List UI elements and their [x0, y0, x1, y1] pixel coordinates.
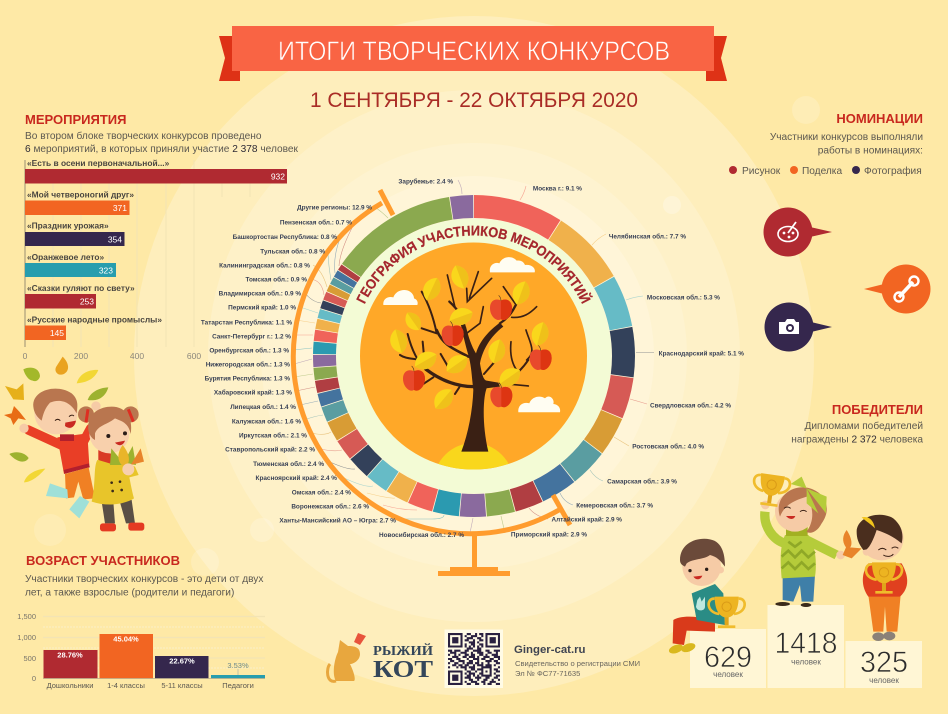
bar chart: events: [23, 158, 287, 361]
donut region labels: [201, 178, 744, 539]
logo: Ginger Cat: [328, 633, 433, 683]
donut region labels: Нижегородская обл.: 1.3 %: [206, 360, 290, 368]
pale green inner ring: [336, 218, 612, 494]
donut region labels: Калининградская обл.: 0.8 %: [219, 262, 310, 270]
donut region labels: Липецкая обл.: 1.4 %: [230, 403, 296, 411]
date subtitle: 1 СЕНТЯБРЯ - 22 ОКТЯБРЯ 2020: [310, 88, 638, 112]
legend: Поделка: [802, 166, 842, 177]
boy holding cup: [857, 515, 907, 641]
panel: nominations: [729, 111, 930, 352]
bar: 932: 932: [271, 172, 285, 182]
y axis labels: 1,500: [17, 612, 36, 621]
podium: first place: [768, 605, 844, 688]
donut region labels: Ханты-Мансийский АО – Югра: 2.7 %: [279, 516, 396, 524]
donut region labels: Краснодарский край: 5.1 %: [659, 350, 744, 358]
bar: 354: [25, 220, 124, 246]
donut region labels: Омская обл.: 2.4 %: [292, 488, 351, 496]
donut region labels: Башкортостан Республика: 0.8 %: [233, 233, 337, 241]
podium: second place: [690, 629, 766, 688]
bar: 253: 253: [80, 296, 94, 306]
donut region labels: Калужская обл.: 1.6 %: [232, 418, 301, 426]
donut region labels: Кемеровская обл.: 3.7 %: [576, 502, 653, 510]
nominations text: работы в номинациях:: [818, 144, 923, 156]
column: preschool: [44, 650, 98, 690]
column: grades 5-11: 5-11 классы: [161, 681, 203, 690]
podium: third place: 325: [860, 646, 908, 679]
legend: Рисунок: [742, 166, 781, 177]
bar: 932: «Есть в осени первоначальной...»: [27, 158, 170, 168]
column: teachers: 3.53%: [227, 661, 249, 670]
donut region labels: Томская обл.: 0.9 %: [245, 276, 307, 284]
panel: events: [23, 112, 298, 361]
heading: events: МЕРОПРИЯТИЯ: [25, 112, 126, 127]
x axis labels: [23, 351, 201, 361]
column: grades 1-4: 45.04%: [113, 634, 139, 644]
donut region labels: Красноярский край: 2.4 %: [256, 474, 337, 482]
donut region labels: Другие регионы: 12.9 %: [297, 204, 372, 212]
bar: 253: [25, 283, 135, 308]
illustration: winners children: [668, 472, 907, 655]
donut region labels: Владимирская обл.: 0.9 %: [219, 290, 301, 298]
donut region labels: Хабаровский край: 1.3 %: [214, 388, 292, 396]
winners text: Дипломами победителей: [805, 420, 923, 432]
illustration: jumping children with leaves: [4, 357, 144, 531]
column chart: age: [17, 612, 265, 690]
heading: age: ВОЗРАСТ УЧАСТНИКОВ: [26, 553, 180, 568]
donut region labels: Иркутская обл.: 2.1 %: [239, 432, 307, 440]
nominations text: Участники конкурсов выполняли: [770, 132, 923, 143]
clouds: [383, 257, 560, 412]
publisher info: Ginger-cat.ru: [514, 644, 586, 656]
logo wordmark: РЫЖИЙ: [373, 642, 433, 659]
podium: second place: человек: [713, 670, 743, 679]
panel: winners: [668, 402, 923, 688]
bar: 323: [25, 252, 116, 277]
tree illustration: [383, 257, 560, 452]
donut region labels: Самарская обл.: 3.9 %: [607, 478, 677, 486]
apples: [403, 295, 552, 407]
globe stand: [293, 190, 570, 574]
publisher info: Эл № ФС77-71635: [515, 669, 580, 678]
bar: 145: [25, 314, 162, 340]
x axis labels: 0: [23, 351, 28, 361]
donut region labels: Пермский край: 1.0 %: [228, 304, 296, 312]
column: grades 1-4: 1-4 классы: [107, 681, 145, 690]
title banner: [219, 26, 727, 81]
winners text: награждены 2 372 человека: [791, 434, 923, 446]
donut region labels: Тульская обл.: 0.8 %: [260, 248, 325, 256]
trunk and branches: [400, 272, 537, 452]
column: teachers: Педагоги: [222, 681, 254, 690]
legend: [729, 165, 922, 177]
donut region labels: Московская обл.: 5.3 %: [647, 294, 720, 302]
donut region labels: Челябинская обл.: 7.7 %: [609, 232, 686, 240]
icon: wrench bubble: [864, 264, 930, 314]
column: grades 5-11: 22.67%: [169, 656, 195, 666]
podium: first place: 1418: [774, 627, 838, 660]
donut region labels: Новосибирская обл.: 2.7 %: [379, 531, 464, 539]
bar: 932: [25, 158, 287, 184]
icon: camera bubble: [764, 302, 832, 352]
donut region labels: Тюменская обл.: 2.4 %: [253, 460, 324, 468]
podium: third place: человек: [869, 676, 899, 685]
bar: 371: «Мой четвероногий друг»: [27, 190, 134, 200]
publisher info: Свидетельство о регистрации СМИ: [515, 659, 640, 668]
y axis labels: [17, 612, 36, 683]
legend: Фотография: [864, 165, 922, 177]
orange tree disc: [360, 242, 587, 470]
leader lines: [293, 180, 654, 533]
bar: 145: 145: [50, 328, 64, 338]
donut region labels: Оренбургская обл.: 1.3 %: [209, 346, 289, 354]
x axis labels: 600: [187, 351, 201, 361]
bar: 323: «Оранжевое лето»: [27, 252, 104, 262]
x axis labels: 400: [130, 351, 144, 361]
column: preschool: Дошкольники: [47, 681, 93, 690]
donut region labels: Санкт-Петербург г.: 1.2 %: [212, 332, 291, 340]
donut region labels: Ставропольский край: 2.2 %: [225, 446, 315, 454]
title: ИТОГИ ТВОРЧЕСКИХ КОНКУРСОВ: [278, 36, 670, 66]
column: preschool: 28.76%: [57, 650, 83, 660]
boy: [19, 389, 101, 518]
hill: [438, 444, 508, 470]
donut region labels: Алтайский край: 2.9 %: [551, 516, 622, 524]
donut region labels: Зарубежье: 2.4 %: [398, 178, 453, 186]
donut region labels: Москва г.: 9.1 %: [533, 186, 582, 192]
bar: 323: 323: [99, 266, 113, 276]
podium: third place: [846, 641, 922, 688]
column: grades 5-11: [155, 656, 208, 690]
icon: palette bubble: [764, 208, 832, 256]
logo wordmark: kot: КОТ: [373, 657, 433, 683]
events intro text: Во втором блоке творческих конкурсов проведено: [25, 130, 262, 142]
age intro text: Участники творческих конкурсов - это дети от двух: [25, 574, 263, 585]
bar: 253: «Сказки гуляют по свету»: [27, 283, 135, 293]
y axis labels: 1,000: [17, 633, 36, 642]
boy with cup, seated: [668, 539, 745, 655]
heading: nominations: НОМИНАЦИИ: [836, 111, 923, 126]
girl raising cup: [751, 472, 845, 607]
x axis labels: 200: [74, 351, 88, 361]
bar: 371: [25, 190, 134, 215]
girl: [78, 406, 144, 531]
curved ring title: ГЕОГРАФИЯ УЧАСТНИКОВ МЕРОПРИЯТИЙ: [356, 226, 593, 304]
bar: 354: 354: [108, 234, 122, 244]
heading: winners: ПОБЕДИТЕЛИ: [832, 402, 923, 417]
podium: second place: 629: [704, 641, 752, 674]
y axis labels: 0: [32, 674, 36, 683]
bar: 354: «Праздник урожая»: [27, 220, 109, 230]
donut region labels: Ростовская обл.: 4.0 %: [632, 442, 704, 450]
donut region labels: Бурятия Республика: 1.3 %: [205, 374, 290, 382]
donut region labels: Воронежская обл.: 2.6 %: [291, 502, 369, 510]
events intro text: 6 мероприятий, в которых приняли участие 2 378 человек: [25, 144, 298, 155]
leaves: [387, 263, 551, 414]
donut region labels: Пензенская обл.: 0.7 %: [280, 218, 352, 226]
bar: 371: 371: [113, 203, 127, 213]
QR code: [444, 630, 503, 688]
panel: age of participants: [17, 553, 265, 690]
cat icon: [328, 633, 366, 681]
publisher info: [514, 644, 640, 678]
column: grades 1-4: [100, 634, 153, 690]
donut region labels: Свердловская обл.: 4.2 %: [650, 402, 731, 410]
age intro text: лет, а также взрослые (родители и педагоги): [25, 588, 234, 598]
bar: 145: «Русские народные промыслы»: [27, 314, 162, 324]
donut region labels: Татарстан Республика: 1.1 %: [201, 318, 292, 326]
podium: first place: человек: [791, 658, 821, 666]
y axis labels: 500: [23, 654, 36, 663]
donut chart: geography of participants: [324, 206, 624, 506]
leaf held by girl: [843, 530, 862, 558]
column: teachers: [211, 661, 265, 690]
donut region labels: Приморский край: 2.9 %: [511, 530, 587, 538]
